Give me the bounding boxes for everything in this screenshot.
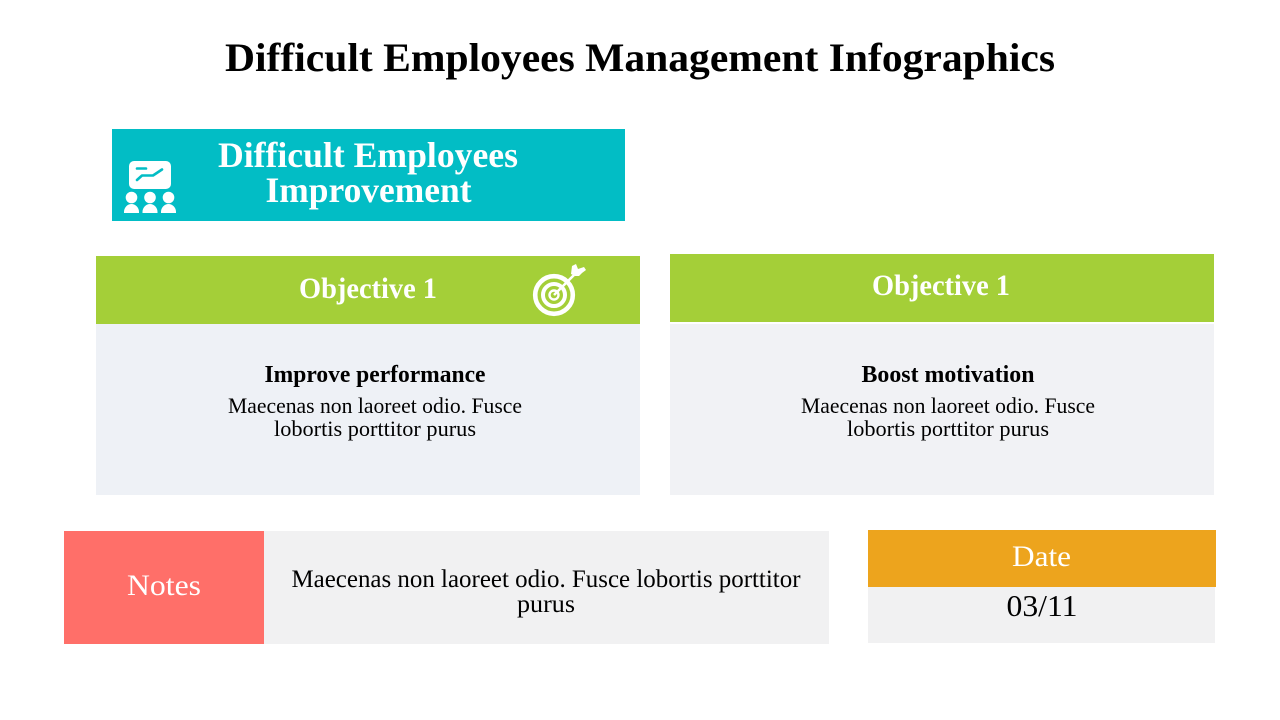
date value: 03/11 xyxy=(1006,588,1078,623)
objective left body: Improve performance xyxy=(264,362,486,388)
panel: objective left xyxy=(96,256,640,495)
notes text: purus xyxy=(517,591,575,618)
objective left heading: Objective 1 xyxy=(299,272,437,305)
date label: Date xyxy=(1012,540,1071,573)
objective left body: Maecenas non laoreet odio. Fusce xyxy=(228,393,522,418)
banner heading xyxy=(218,135,518,210)
objective right body xyxy=(801,362,1095,441)
objective right body: lobortis porttitor purus xyxy=(847,416,1049,441)
title: Difficult Employees Management Infographics xyxy=(225,35,1055,80)
objective right body: Maecenas non laoreet odio. Fusce xyxy=(801,393,1095,418)
icon: presentation audience xyxy=(124,161,176,213)
notes text: Maecenas non laoreet odio. Fusce lobortis porttitor xyxy=(292,566,801,593)
panel: objective right xyxy=(670,254,1214,495)
panel: improvement banner xyxy=(112,129,625,221)
objective right heading: Objective 1 xyxy=(872,269,1010,302)
banner heading: Difficult Employees xyxy=(218,135,518,175)
panel: date xyxy=(868,530,1216,643)
icon: target with darts xyxy=(535,264,586,314)
objective left body: lobortis porttitor purus xyxy=(274,416,476,441)
objective right body: Boost motivation xyxy=(862,362,1034,388)
objective left body xyxy=(228,362,522,441)
notes label: Notes xyxy=(127,569,201,602)
panel: notes xyxy=(64,531,829,644)
notes text xyxy=(292,566,801,618)
banner heading: Improvement xyxy=(266,170,472,210)
